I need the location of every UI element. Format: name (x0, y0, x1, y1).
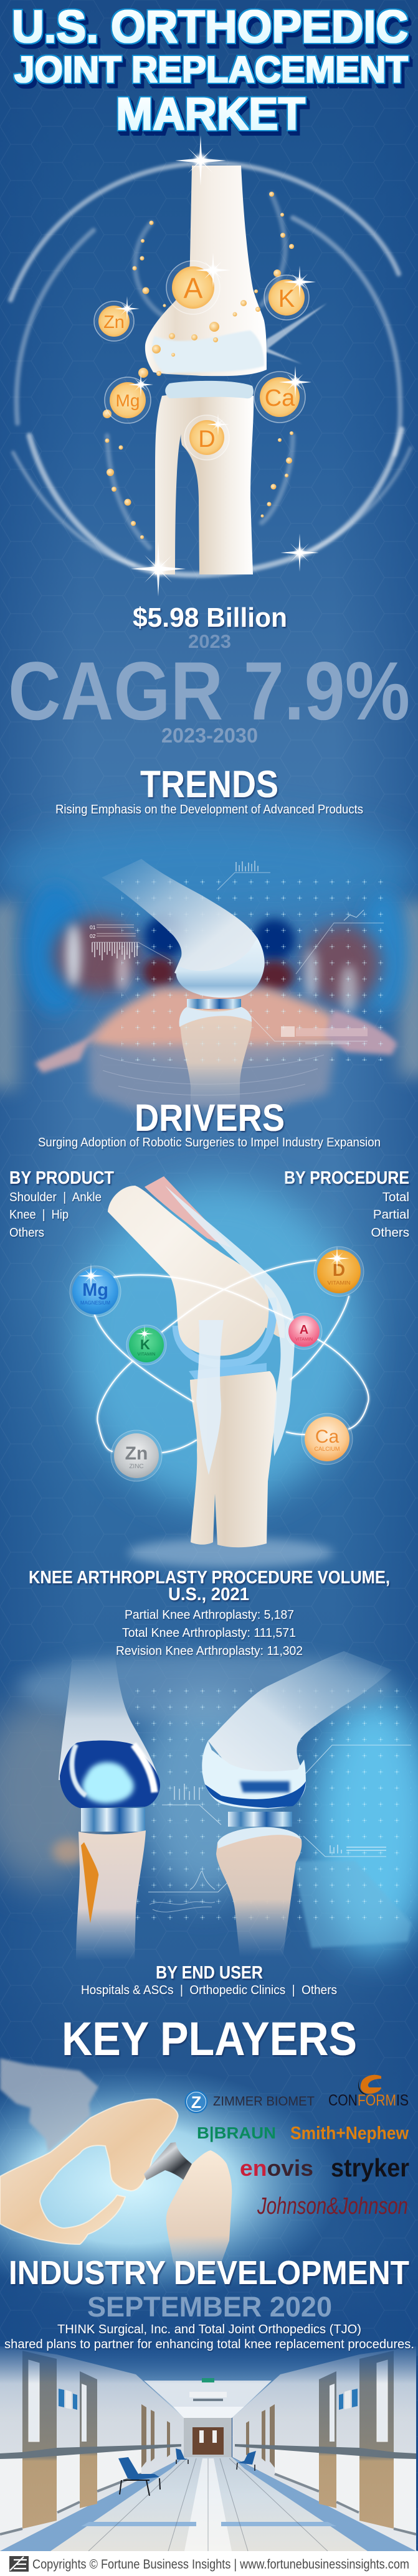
left wall with doors and rail (0, 2346, 184, 2551)
company logos (185, 2075, 409, 2219)
B. Braun logo: B|BRAUN (197, 2124, 276, 2142)
metal ball and stem (144, 2142, 192, 2180)
zinc bubble (94, 296, 140, 341)
by product segment: Others (9, 1225, 44, 1240)
light glow (0, 2066, 343, 2303)
Zimmer Biomet logo: ZIMMER BIOMET (213, 2094, 315, 2109)
tendons (165, 1186, 295, 1456)
Enovis logo: enovis (240, 2155, 313, 2181)
vitamin K bubble: K (278, 285, 295, 312)
knee arthroplasty heading (29, 1568, 390, 1604)
by product segment (9, 1168, 115, 1240)
lower leg bones (190, 1371, 277, 1547)
implant backdrop (0, 1652, 418, 1954)
femur bone (145, 166, 267, 376)
Zimmer Biomet logo: Z (191, 2093, 201, 2112)
vitamin K nutrient: K (140, 1337, 150, 1352)
vitamin K nutrient (126, 1325, 166, 1365)
procedure volume figures: Partial Knee Arthroplasty: 5,187 (125, 1608, 294, 1622)
nutrient particles (103, 192, 294, 539)
left tibia and fibula (76, 1830, 146, 1960)
vitamin A nutrient: VITAMIN (295, 1337, 313, 1342)
calcium bubble: Ca (265, 385, 295, 411)
title: JOINT REPLACEMENT (14, 49, 408, 90)
vitamin D nutrient: VITAMIN (328, 1280, 350, 1286)
title: MARKET (116, 89, 305, 139)
base year: 2023 (188, 630, 231, 652)
development description (4, 2322, 414, 2351)
zinc nutrient: ZINC (129, 1463, 144, 1470)
HUD data readouts: 01 (90, 924, 96, 930)
vitamin K nutrient: VITAMIN (137, 1352, 156, 1357)
pelvis bone (0, 2099, 178, 2244)
procedure volume figures: Total Knee Arthroplasty: 111,571 (122, 1626, 296, 1640)
zinc nutrient: Zn (125, 1443, 148, 1464)
vitamin K bubble (264, 266, 316, 320)
vitamin D bubble: D (198, 426, 216, 452)
blurred hands and glow background (0, 822, 418, 1110)
hero illustration: glowing rings around a knee joint (11, 135, 411, 596)
calcium nutrient: Ca (315, 1426, 339, 1447)
development description: shared plans to partner for enhancing total knee replacement procedures. (4, 2337, 414, 2351)
floor (0, 2457, 418, 2551)
background glow (75, 1183, 361, 1506)
trends illustration: knee implant over hands (0, 822, 418, 1110)
tibia with implant base (180, 1007, 252, 1108)
HUD data lines (148, 1745, 411, 1912)
meniscus (165, 381, 254, 398)
title (12, 2, 408, 139)
vitamin A bubble (166, 253, 230, 314)
calcium nutrient: CALCIUM (314, 1446, 340, 1452)
Stryker logo: stryker (331, 2153, 409, 2182)
femur (108, 1186, 268, 1356)
HUD data readouts: 02 (90, 933, 96, 939)
tibia and fibula (155, 393, 254, 574)
by end user segment: BY END USER (156, 1963, 263, 1983)
Zimmer Biomet logo (185, 2091, 315, 2113)
development description: THINK Surgical, Inc. and Total Joint Orthopedics (TJO) (57, 2322, 361, 2336)
magnesium nutrient (70, 1263, 121, 1317)
by end user segment: Hospitals & ASCs | Orthopedic Clinics | Others (81, 1983, 337, 1997)
tibial tray (187, 999, 241, 1009)
left tibial tray (81, 1808, 145, 1832)
ConforMIS logo (328, 2075, 409, 2109)
ConforMIS logo: CONFORMIS (328, 2092, 409, 2109)
Smith and Nephew logo: Smith+Nephew (290, 2124, 409, 2143)
knee implants illustration (0, 1651, 418, 1960)
meniscus ring (176, 1298, 273, 1364)
calcium bubble (254, 366, 311, 423)
femur (166, 2150, 232, 2272)
floor glow (128, 1538, 333, 1568)
right tibial tray (228, 1812, 292, 1827)
right femur (208, 1651, 392, 1792)
top fade into page (0, 2340, 418, 2384)
left femur (59, 1654, 160, 1784)
right tibia (216, 1828, 302, 1957)
cross-grid overlay (131, 1680, 411, 1929)
by product segment: Knee | Hip (9, 1207, 69, 1222)
by end user segment (81, 1963, 337, 1997)
development date: SEPTEMBER 2020 (87, 2291, 332, 2323)
by procedure segment (284, 1168, 409, 1240)
market value: $5.98 Billion (133, 602, 287, 633)
vitamin A nutrient (286, 1313, 322, 1349)
magnesium nutrient: Mg (82, 1280, 108, 1300)
hospital corridor photo (0, 2340, 418, 2551)
magnesium nutrient: MAGNESIUM (80, 1300, 110, 1306)
vitamin A bubble: A (184, 272, 203, 304)
footer (0, 2551, 418, 2576)
patella (264, 1284, 285, 1338)
forecast period: 2023-2030 (161, 724, 258, 747)
trends heading: TRENDS (140, 763, 278, 805)
knee arthroplasty heading: U.S., 2021 (168, 1585, 249, 1604)
vitamin D nutrient: D (333, 1260, 345, 1280)
chairs (118, 2448, 256, 2496)
procedure volume figures: Revision Knee Arthroplasty: 11,302 (116, 1644, 303, 1658)
quadriceps muscle (145, 1176, 232, 1248)
zinc nutrient (111, 1430, 162, 1481)
end wall and door (184, 2418, 232, 2457)
vitamin A nutrient: A (300, 1323, 308, 1337)
by procedure segment: Total (382, 1190, 409, 1204)
procedure volume figures (116, 1608, 303, 1658)
cross-grid overlay (121, 871, 389, 1061)
vitamin D nutrient (314, 1246, 364, 1296)
hip implant illustration (0, 2058, 343, 2303)
by product segment: BY PRODUCT (9, 1168, 115, 1188)
right wall with doors and rail (232, 2346, 416, 2551)
magnesium bubble (105, 372, 153, 423)
glowing rings (11, 163, 411, 575)
zinc bubble: Zn (103, 312, 125, 332)
magnesium bubble: Mg (116, 391, 140, 410)
vitamin D bubble (184, 413, 229, 460)
orbit lines (95, 1260, 369, 1453)
by procedure segment: Partial (373, 1207, 409, 1222)
HUD data readouts (90, 861, 384, 1044)
drivers description: Surging Adoption of Robotic Surgeries to Impel Industry Expansion (38, 1135, 381, 1150)
ceiling (0, 2346, 418, 2418)
meniscus plate (189, 1363, 267, 1380)
icon: Fortune Business Insights logo (9, 2556, 29, 2572)
trends description: Rising Emphasis on the Development of Advanced Products (55, 802, 363, 817)
title: U.S. ORTHOPEDIC (12, 2, 408, 52)
knee anatomy illustration with orbiting nutrients (70, 1176, 369, 1568)
by procedure segment: Others (371, 1225, 409, 1240)
calcium nutrient (302, 1413, 353, 1464)
cartilage (152, 330, 264, 373)
by product segment: Shoulder | Ankle (9, 1190, 102, 1204)
left femoral implant (60, 1741, 160, 1808)
key players heading: KEY PLAYERS (62, 2013, 357, 2066)
right femoral implant (202, 1741, 306, 1809)
drivers heading: DRIVERS (135, 1097, 285, 1139)
femur implant (102, 859, 264, 990)
upper pelvis (0, 2058, 98, 2152)
bone-surface sparkles and light streak (265, 303, 327, 364)
